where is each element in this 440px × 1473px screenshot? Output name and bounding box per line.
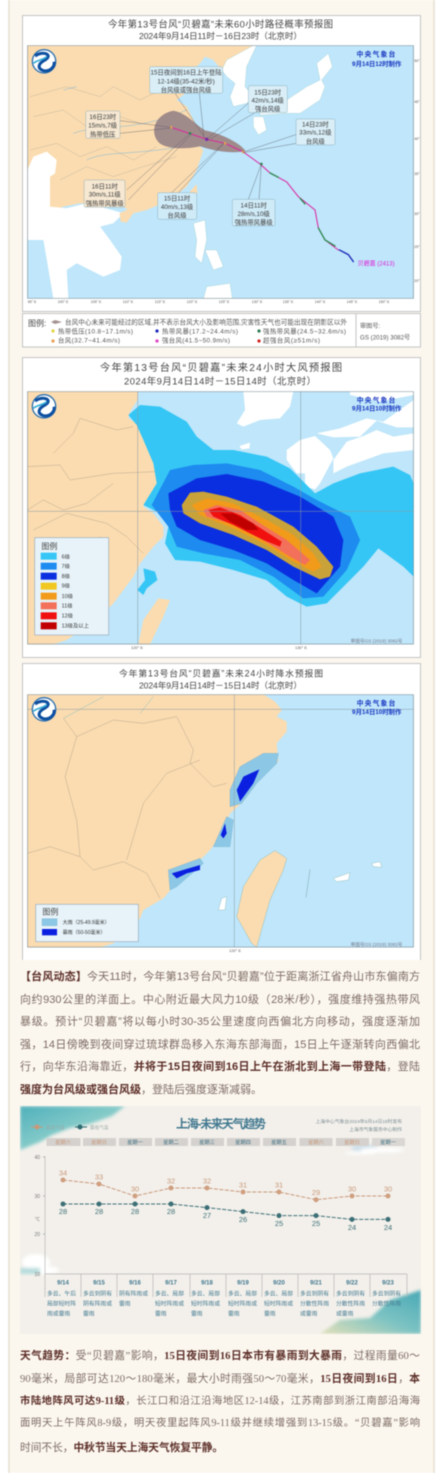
agency stamp: 中央气象台 bbox=[357, 698, 397, 707]
line: daily high temperature bbox=[59, 1168, 392, 1202]
weekday tabs: 星期二 bbox=[163, 1139, 179, 1146]
callout labels: 28m/s,10级 bbox=[238, 209, 271, 218]
text block: weather trend bbox=[20, 1348, 420, 1454]
wind level 6 bbox=[128, 405, 414, 607]
callout labels: 15日夜间到16日上午登陆 bbox=[151, 68, 222, 77]
line: daily high temperature: 31 bbox=[275, 1180, 283, 1190]
forecast table: 分散性阵雨 bbox=[372, 1300, 401, 1308]
forecast table: 短时阵雨或 bbox=[264, 1300, 293, 1308]
longitude and latitude axis labels: 95° E bbox=[28, 300, 37, 304]
line: daily low temperature bbox=[59, 1202, 392, 1232]
weekday tabs: 星期一 bbox=[127, 1139, 143, 1146]
forecast table: 9/22 bbox=[346, 1280, 358, 1286]
text block: typhoon update: 向约930公里的洋面上。中心附近最大风力10级（28米/秒），强度维持强热带风 bbox=[20, 994, 420, 1006]
text block: typhoon update: 强度为台风级或强台风级，登陆后强度逐渐减弱。 bbox=[20, 1084, 262, 1096]
longitude and latitude axis labels: 120° E bbox=[187, 300, 198, 304]
leader lines bbox=[120, 93, 300, 200]
agency stamp: 中央气象台 bbox=[357, 395, 397, 404]
wind level 7 bbox=[152, 463, 360, 598]
text block: weather trend: 天气趋势：受“贝碧嘉”影响，15日夜间到16日本市有暴雨到大暴雨，过程雨量60～ bbox=[20, 1350, 420, 1362]
typhoon name label: 贝碧嘉 (2413) bbox=[358, 259, 395, 267]
forecast table: 阴有阵雨或 bbox=[119, 1290, 148, 1298]
title: wind map: 今年第13号台风“贝碧嘉”未来24小时大风预报图 bbox=[100, 361, 342, 374]
forecast table: 多云、局部 bbox=[155, 1290, 184, 1298]
chart legend: 最低气温 bbox=[90, 1124, 109, 1131]
legend: intensity categories: 超强台风(≥51m/s) bbox=[263, 336, 320, 344]
longitude and latitude axis labels: 145° E bbox=[347, 300, 358, 304]
line: daily low temperature: 27 bbox=[203, 1211, 211, 1220]
panel: wind forecast map bbox=[22, 356, 422, 658]
forecast table: 9/16 bbox=[129, 1280, 141, 1286]
line: daily low temperature: 25 bbox=[275, 1219, 283, 1228]
forecast table: 9/15 bbox=[93, 1280, 105, 1286]
longitude and latitude axis labels: 30° bbox=[414, 212, 420, 216]
agency stamp bbox=[352, 698, 402, 716]
agency stamp bbox=[352, 49, 402, 68]
text block: typhoon update: 暴级。预计“贝碧嘉”将以每小时30-35公里速度向西偏北方向移动，强度逐渐加 bbox=[20, 1016, 420, 1028]
longitude and latitude axis labels: 110° E bbox=[123, 300, 134, 304]
legend: wind levels: 13级及以上 bbox=[62, 622, 90, 630]
legend: cone description: 台风中心未来可能经过的区域,并不表示台风大小及影响范围,灾害性天气也可能出现在阴影区以外 bbox=[65, 318, 347, 326]
longitude and latitude axis labels: 130° E bbox=[252, 300, 263, 304]
text block: typhoon update: 【台风动态】今天11时，今年第13号台风“贝碧嘉”位于距离浙江省舟山市东偏南方 bbox=[20, 971, 420, 983]
wind level 10 bbox=[192, 498, 322, 572]
line: daily low temperature: 28 bbox=[131, 1207, 139, 1216]
map: rainfall bbox=[27, 694, 414, 948]
weekday tabs: 星期一 bbox=[380, 1139, 396, 1146]
line: daily high temperature: 32 bbox=[167, 1176, 175, 1186]
legend: intensity categories: 强热带风暴(24.5~32.6m/s) bbox=[263, 326, 346, 336]
forecast table: 9/17 bbox=[165, 1280, 177, 1286]
panel: track map legend bbox=[22, 312, 422, 348]
forecast table: 雨或雷雨 bbox=[47, 1310, 70, 1318]
line: daily low temperature: 26 bbox=[239, 1215, 247, 1224]
line: daily high temperature: 33 bbox=[95, 1172, 103, 1182]
forecast table: 多云到阴有 bbox=[300, 1290, 329, 1298]
forecast table: 9/19 bbox=[237, 1280, 249, 1286]
legend: rainfall levels: 大雨（25-49.9毫米） bbox=[63, 919, 110, 926]
longitude labels: 130° E bbox=[295, 645, 307, 650]
temperature axis: 10 bbox=[34, 1272, 40, 1278]
line: daily low temperature: 24 bbox=[348, 1223, 356, 1232]
legend: intensity categories bbox=[51, 326, 346, 344]
longitude label: 120° E bbox=[229, 948, 241, 953]
longitude and latitude axis labels: 40° bbox=[414, 137, 420, 141]
text block: weather trend: 市陆地阵风可达9-11级，长江口和沿江沿海地区12-14级，江苏南部到浙江南部沿海海 bbox=[20, 1396, 420, 1407]
weekday tabs: 星期六 bbox=[308, 1138, 324, 1146]
wind level 8 bbox=[168, 474, 343, 593]
temperature axis bbox=[34, 1155, 45, 1278]
legend: intensity categories: 热带低压(10.8~17.1m/s) bbox=[58, 326, 133, 336]
text block: weather trend: 90毫米，局部可达120～180毫米，最大小时雨强50～70毫米，15日夜间到16日，本 bbox=[20, 1373, 420, 1385]
forecast table: 雷雨 bbox=[83, 1310, 95, 1318]
legend: wind levels bbox=[35, 538, 109, 635]
longitude and latitude axis labels: 20° bbox=[414, 279, 420, 283]
text block: typhoon update: 行，向华东沿海靠近，并将于15日夜间到16日上午在浙北到上海一带登陆，登陆 bbox=[20, 1061, 420, 1073]
longitude and latitude axis labels: 100° E bbox=[58, 300, 69, 304]
wind level 13 bbox=[220, 513, 258, 530]
forecast table: 雷雨 bbox=[155, 1310, 167, 1318]
legend: wind levels: 10级 bbox=[62, 592, 74, 600]
title: wind map: 2024年9月14日14时－15日14时（北京时） bbox=[124, 376, 316, 386]
weekday tabs: 星期日 bbox=[91, 1139, 107, 1146]
wind level 9 bbox=[182, 492, 333, 579]
icon: meteorological logo bbox=[32, 698, 56, 721]
title: rainfall map: 2024年9月14日14时－15日14时（北京时） bbox=[139, 680, 302, 690]
longitude and latitude axis labels: 140° E bbox=[315, 300, 326, 304]
title: rainfall map: 今年第13号台风“贝碧嘉”未来24小时降水预报图 bbox=[119, 668, 323, 678]
longitude labels bbox=[131, 645, 307, 650]
forecast table: 雷雨 bbox=[119, 1300, 131, 1308]
legend: intensity categories: 台风(32.7~41.4m/s) bbox=[58, 336, 120, 344]
legend: wind levels: 图例 bbox=[41, 541, 57, 551]
longitude and latitude axis labels: 115° E bbox=[155, 300, 166, 304]
approval mark: 审图号GS (2019) 3082号 bbox=[351, 638, 403, 645]
forecast table: 局部短时阵 bbox=[47, 1300, 76, 1308]
forecast table: 雷雨 bbox=[228, 1310, 240, 1318]
callout labels: 30m/s,11级 bbox=[89, 190, 121, 199]
longitude and latitude axis labels: 25° bbox=[414, 245, 420, 249]
text block: typhoon update: 强，14日傍晚到夜间穿过琉球群岛移入东海东部海面，15日上午逐渐转向西偏北 bbox=[20, 1039, 420, 1051]
callout labels: 15日11时 bbox=[164, 194, 191, 203]
longitude and latitude axis labels: 35° bbox=[414, 172, 420, 176]
decorative clouds top-right bbox=[344, 1144, 404, 1154]
chart title: 上海-未来天气趋势 bbox=[176, 1116, 266, 1131]
line: daily low temperature: 24 bbox=[384, 1223, 392, 1232]
weekday tabs: 星期日 bbox=[344, 1139, 360, 1146]
forecast table: 多云、午后 bbox=[47, 1290, 76, 1298]
legend: wind levels: 11级 bbox=[62, 602, 73, 610]
callout labels: 台风级或强台风级 bbox=[161, 85, 212, 94]
weekday tabs: 星期五 bbox=[271, 1139, 287, 1146]
forecast table: 多云到阴有 bbox=[83, 1290, 112, 1298]
callout labels: 台风级 bbox=[168, 211, 187, 220]
issuer note: 上海市气象服务中心制作 bbox=[349, 1126, 402, 1133]
title: track map: 2024年9月14日11时－16日23时（北京时） bbox=[139, 30, 302, 41]
legend heading: 图例: bbox=[28, 318, 46, 328]
weekday tabs: 星期三 bbox=[199, 1139, 215, 1146]
wind level 11 bbox=[203, 505, 310, 565]
callout labels: 12-14级(35-42米/秒) bbox=[157, 76, 215, 85]
map approval number: GS (2019) 3082号 bbox=[360, 334, 410, 342]
temperature axis: 40 bbox=[34, 1155, 40, 1161]
callout labels: 42m/s,14级 bbox=[252, 95, 285, 104]
forecast table: 短时阵雨或 bbox=[191, 1300, 220, 1308]
decorative flowers bottom-left bbox=[20, 1254, 59, 1274]
line: daily low temperature: 25 bbox=[312, 1219, 320, 1228]
callout labels: 16日23时 bbox=[89, 112, 117, 121]
temperature axis: 30 bbox=[34, 1194, 40, 1200]
agency stamp: 9月14日10时制作 bbox=[352, 707, 402, 716]
forecast table: 雷雨 bbox=[264, 1310, 276, 1318]
callout labels: 15日23时 bbox=[254, 87, 282, 96]
forecast table: 多云、局部 bbox=[228, 1290, 257, 1298]
forecast table: 9/23 bbox=[382, 1280, 394, 1286]
forecast table: 9/21 bbox=[310, 1280, 322, 1286]
map: track forecast bbox=[27, 45, 414, 299]
weekday tabs: 星期四 bbox=[235, 1139, 251, 1146]
probability cone bbox=[154, 111, 245, 152]
forecast table: 9/20 bbox=[273, 1280, 285, 1286]
issuer note bbox=[316, 1118, 402, 1133]
callout labels: 15m/s,7级 bbox=[88, 120, 118, 129]
forecast table: 多云、局部 bbox=[264, 1290, 293, 1298]
legend: intensity categories: 强台风(41.5~50.9m/s) bbox=[162, 336, 230, 344]
forecast table bbox=[45, 1274, 407, 1318]
line: daily low temperature: 28 bbox=[59, 1207, 67, 1216]
callout labels bbox=[84, 67, 335, 227]
panel: rainfall forecast map bbox=[22, 662, 422, 960]
forecast table: 多云到阴有 bbox=[336, 1290, 365, 1298]
callout labels: 14日23时 bbox=[302, 119, 329, 128]
legend: wind levels: 12级 bbox=[62, 612, 74, 620]
text block: weather trend: 时间不长，中秋节当天上海天气恢复平静。 bbox=[20, 1442, 223, 1454]
longitude and latitude axis labels bbox=[28, 59, 420, 304]
legend: intensity categories: 热带风暴(17.2~24.4m/s) bbox=[162, 326, 238, 336]
title: track map: 今年第13号台风“贝碧嘉”未来60小时路径概率预报图 bbox=[108, 18, 333, 30]
longitude and latitude axis labels: 45° bbox=[414, 100, 420, 104]
legend: wind levels: 7级 bbox=[62, 562, 71, 570]
map: wind bbox=[27, 391, 414, 645]
approval mark: 审图号GS (2019) 3082号 bbox=[351, 941, 403, 948]
map approval number: 审图号: bbox=[360, 322, 381, 330]
longitude and latitude axis labels: 125° E bbox=[219, 300, 230, 304]
longitude and latitude axis labels: 135° E bbox=[283, 300, 294, 304]
text block: typhoon update bbox=[20, 970, 420, 1096]
title: track map bbox=[108, 18, 333, 41]
decorative watercolor corner top-left bbox=[20, 1106, 125, 1150]
rainstorm areas bbox=[172, 769, 259, 878]
longitude labels: 120° E bbox=[131, 645, 143, 650]
panel: typhoon track probability map bbox=[22, 14, 422, 312]
legend: rainfall levels: 图例 bbox=[42, 907, 58, 917]
line: daily high temperature: 34 bbox=[59, 1168, 67, 1178]
callout labels: 强台风级 bbox=[255, 104, 281, 113]
chart legend: 最高气温 bbox=[46, 1124, 65, 1131]
callout labels: 台风级 bbox=[306, 136, 326, 145]
line: daily low temperature: 28 bbox=[167, 1207, 175, 1216]
callout labels: 40m/s,13级 bbox=[161, 202, 194, 211]
temperature axis: ℃ bbox=[35, 1217, 40, 1223]
agency stamp: 中央气象台 bbox=[357, 49, 397, 58]
longitude and latitude axis labels: 105° E bbox=[91, 300, 102, 304]
forecast table: 9/18 bbox=[201, 1280, 213, 1286]
line: daily high temperature: 30 bbox=[131, 1184, 139, 1194]
title: rainfall map bbox=[119, 668, 323, 690]
forecast table: 或雷雨 bbox=[336, 1310, 354, 1318]
legend: wind levels: 9级 bbox=[62, 582, 71, 590]
decorative watercolor corner bottom-right bbox=[320, 1290, 421, 1334]
forecast table: 短时阵雨或 bbox=[228, 1300, 257, 1308]
forecast table: 9/14 bbox=[57, 1280, 69, 1286]
line: daily low temperature: 28 bbox=[95, 1207, 103, 1216]
callout labels: 14日11时 bbox=[241, 201, 267, 210]
callout labels: 热带低压 bbox=[90, 129, 116, 138]
callout labels: 强热带风暴级 bbox=[235, 218, 273, 227]
text block: weather trend: 面明天上午阵风8-9级，明天夜里起阵风9-11级并继续增强到13-15级。“贝碧嘉”影响 bbox=[20, 1418, 420, 1429]
weekday tabs bbox=[46, 1138, 405, 1146]
forecast table: 或雷雨 bbox=[300, 1310, 318, 1318]
line: daily high temperature: 31 bbox=[239, 1180, 247, 1190]
callout labels: 强热带风暴级 bbox=[86, 198, 124, 207]
forecast table: 阴有阵雨或 bbox=[83, 1300, 112, 1308]
forecast table: 短时阵雨或 bbox=[155, 1300, 184, 1308]
line: daily high temperature: 32 bbox=[203, 1176, 211, 1186]
weekday tabs: 星期六 bbox=[55, 1138, 71, 1146]
agency stamp bbox=[352, 395, 402, 413]
line: daily high temperature: 30 bbox=[348, 1184, 356, 1194]
forecast table: 多云、局部 bbox=[191, 1290, 220, 1298]
longitude and latitude axis labels: 50° bbox=[414, 59, 420, 63]
longitude and latitude axis labels: 150° E bbox=[379, 300, 390, 304]
legend: wind levels: 8级 bbox=[62, 572, 71, 580]
panel: Shanghai weather trend chart bbox=[20, 1106, 422, 1334]
legend: wind levels: 6级 bbox=[62, 552, 71, 560]
callout labels: 16日11时 bbox=[92, 181, 119, 190]
forecast table: 分散性阵雨 bbox=[300, 1300, 329, 1308]
callout labels: 33m/s,12级 bbox=[299, 128, 332, 137]
heavy rain areas bbox=[168, 753, 278, 890]
legend: rainfall levels: 暴雨（50-50毫米） bbox=[63, 929, 105, 936]
typhoon track line bbox=[171, 127, 353, 262]
icon: meteorological logo bbox=[32, 395, 56, 418]
temperature axis: 20 bbox=[34, 1232, 40, 1238]
line: daily high temperature: 30 bbox=[384, 1184, 392, 1194]
icon: meteorological logo bbox=[32, 50, 56, 73]
issuer note: 上海中心气象台2024年9月14日18时发布 bbox=[316, 1118, 402, 1125]
forecast table: 雷雨 bbox=[191, 1310, 203, 1318]
title: wind map bbox=[100, 361, 342, 386]
chart legend bbox=[31, 1124, 109, 1131]
map approval number bbox=[360, 322, 410, 342]
legend: rainfall levels bbox=[36, 904, 138, 942]
agency stamp: 9月14日12时制作 bbox=[352, 59, 402, 68]
wind level 12 bbox=[208, 507, 282, 547]
line: daily high temperature: 29 bbox=[312, 1188, 320, 1197]
agency stamp: 9月14日10时制作 bbox=[352, 404, 402, 413]
forecast table: 多云到阴有 bbox=[372, 1290, 401, 1298]
forecast table: 分散性阵雨 bbox=[336, 1300, 365, 1308]
